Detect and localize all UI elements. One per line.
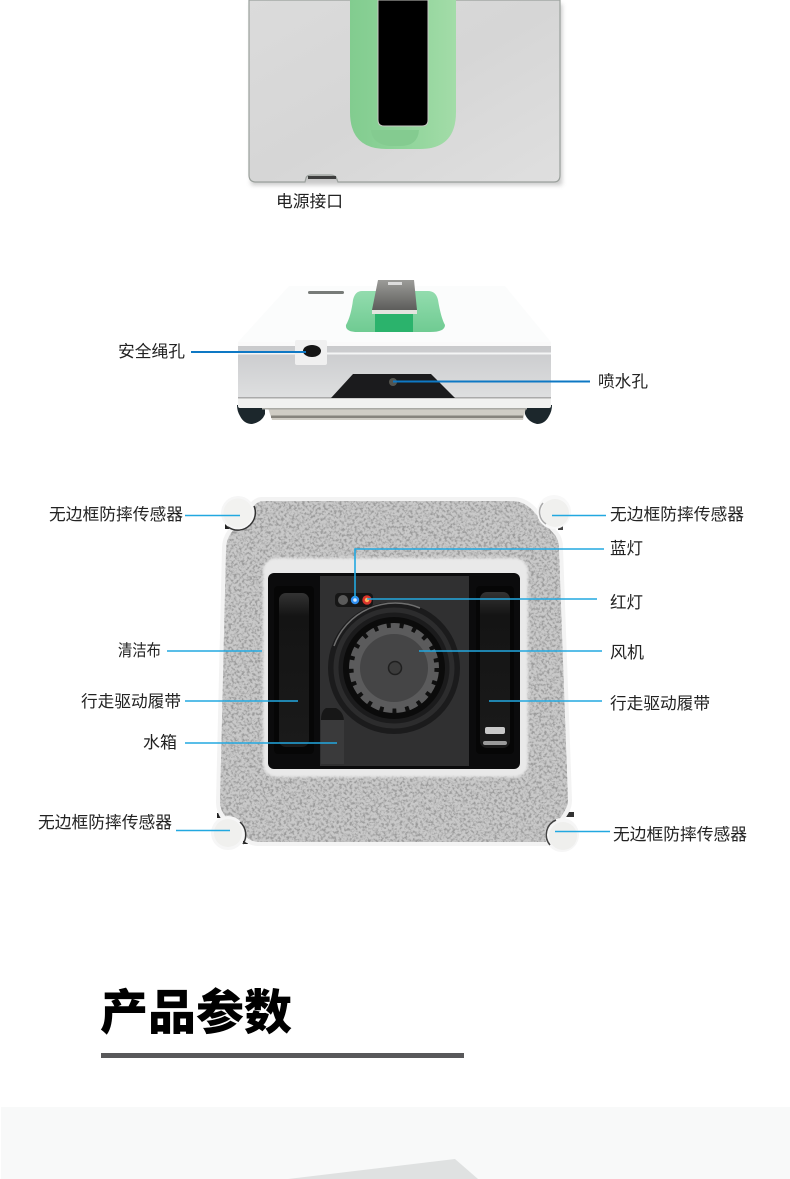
green block [375, 313, 413, 332]
label: sensor top left: 无边框防摔传感器 [49, 505, 183, 524]
label: track right: 行走驱动履带 [610, 694, 710, 713]
label: sensor bottom left: 无边框防摔传感器 [38, 813, 172, 832]
label: rope hole: 安全绳孔 [118, 342, 185, 361]
black handle [378, 0, 428, 126]
label: spray hole: 喷水孔 [598, 372, 648, 391]
water tank [321, 708, 344, 764]
cloth inner border [263, 558, 528, 777]
label: sensor bottom right: 无边框防摔传感器 [613, 825, 747, 844]
label: water tank: 水箱 [143, 733, 177, 752]
top face [238, 286, 551, 346]
robot front view [237, 280, 552, 424]
cloth edge [268, 408, 526, 420]
heading: 产品参数 [100, 973, 292, 1043]
robot bottom view [211, 495, 579, 852]
front body [238, 346, 551, 398]
corner sensor BL [211, 816, 246, 850]
handle [372, 280, 417, 310]
label: blue light [355, 539, 643, 598]
label: power port: 电源接口 [276, 192, 343, 211]
center plate [320, 576, 469, 766]
dark panel [268, 573, 520, 769]
product silhouette [288, 1159, 478, 1179]
cleaning cloth border [216, 497, 572, 846]
corner sensor TR [537, 495, 571, 529]
fan [328, 602, 460, 734]
LED pod [335, 593, 373, 607]
robot top view with power port [249, 0, 562, 185]
corner sensor BR [545, 818, 579, 852]
label: red light: 红灯 [610, 593, 643, 612]
cleaning cloth [220, 501, 568, 842]
heading underline [101, 1053, 464, 1058]
right track [476, 586, 514, 754]
rope hole [295, 340, 327, 365]
label: cloth: 清洁布 [118, 641, 161, 660]
parameters panel [1, 1107, 790, 1179]
green recess [346, 291, 445, 332]
label: blue light: 蓝灯 [610, 539, 643, 558]
label: sensor top right: 无边框防摔传感器 [610, 505, 744, 524]
feet [237, 405, 265, 424]
spray hole housing [331, 374, 455, 398]
green handle recess [350, 0, 456, 149]
vent slot [308, 291, 344, 294]
left track [274, 586, 314, 754]
corner sensor TL [221, 496, 255, 530]
power port notch [308, 176, 336, 179]
corner bits [225, 524, 231, 529]
label: track left: 行走驱动履带 [81, 692, 181, 711]
label: fan: 风机 [610, 643, 644, 662]
